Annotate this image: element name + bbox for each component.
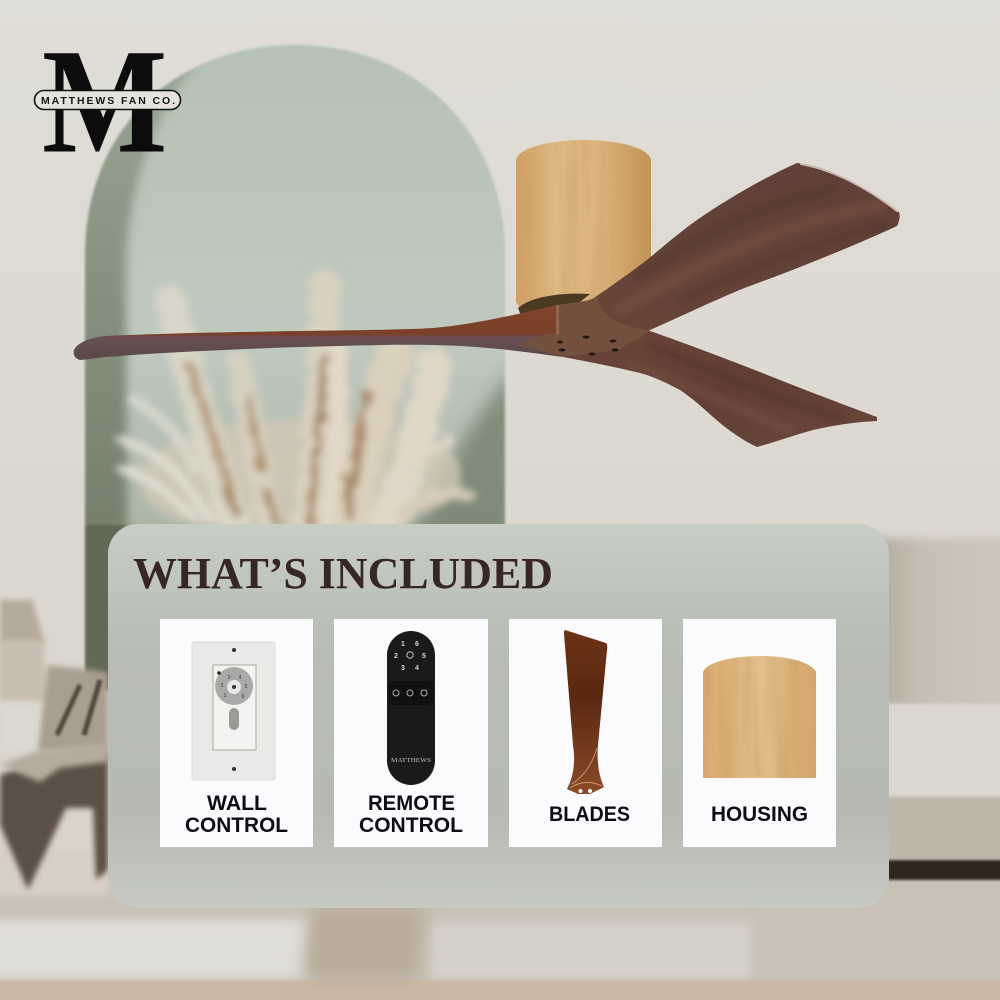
icon: wall control plate <box>192 642 275 780</box>
label: BLADES <box>549 803 630 826</box>
card: housing <box>683 619 836 847</box>
background: floor and rug <box>0 850 1000 1000</box>
icon: remote: 6 <box>415 641 419 648</box>
logo <box>34 18 180 184</box>
panel: what's included <box>108 524 889 908</box>
label: HOUSING <box>711 803 808 826</box>
heading: WHAT’S INCLUDED <box>133 549 553 598</box>
background: left armchair with throw blanket <box>0 600 108 890</box>
background: pampas grass <box>122 285 470 530</box>
background: right sofa <box>875 538 1000 880</box>
icon: remote: 5 <box>422 653 426 660</box>
icon: remote: 4 <box>415 665 419 672</box>
icon: remote: 3 <box>401 665 405 672</box>
label: WALL <box>207 792 267 815</box>
label: CONTROL <box>359 814 463 837</box>
icon: housing <box>703 656 816 778</box>
card: blades <box>509 619 662 847</box>
background: arched green niche <box>70 45 515 700</box>
card: remote control <box>334 619 488 847</box>
icon: wall control plate: 6 <box>242 694 245 700</box>
logo name pill <box>34 90 180 110</box>
fan housing <box>516 140 651 320</box>
icon: remote: MATTHEWS <box>391 757 431 764</box>
logo monogram M: M <box>42 18 167 184</box>
label: CONTROL <box>185 814 288 837</box>
icon: wall control plate: 5 <box>245 684 248 690</box>
fan blade: lower right <box>563 331 877 447</box>
fan hub with mounting holes <box>520 296 650 357</box>
icon: blade <box>564 630 607 794</box>
icon: remote: 2 <box>394 653 398 660</box>
icon: wall control plate: 2 <box>221 683 224 689</box>
fan blade: left <box>74 305 600 360</box>
fan blade: upper right <box>593 163 900 330</box>
icon: wall control plate: 4 <box>239 675 242 681</box>
icon: wall control plate: 3 <box>228 675 231 681</box>
logo name pill: MATTHEWS FAN CO. <box>41 95 175 107</box>
icon: wall control plate: 1 <box>224 693 227 699</box>
icon: remote <box>387 631 435 785</box>
ceiling fan <box>74 140 900 447</box>
label: REMOTE <box>368 792 455 815</box>
icon: remote: 1 <box>401 641 405 648</box>
card: wall control <box>160 619 313 847</box>
